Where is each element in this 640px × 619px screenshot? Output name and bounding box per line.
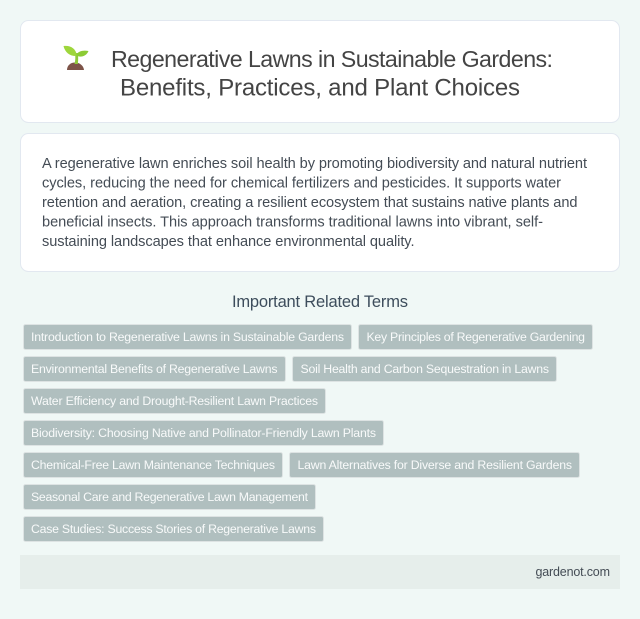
- chip: soil health: Soil Health and Carbon Sequestration in Lawns: [300, 362, 549, 376]
- chip: environmental benefits: Environmental Benefits of Regenerative Lawns: [31, 362, 278, 376]
- chip: case studies: Case Studies: Success Stories of Regenerative Lawns: [31, 522, 316, 536]
- description text: [42, 156, 587, 250]
- chip: seasonal care: [24, 484, 316, 510]
- chip: chemical-free: Chemical-Free Lawn Maintenance Techniques: [31, 458, 275, 472]
- chip: lawn alternatives: Lawn Alternatives for Diverse and Resilient Gardens: [298, 458, 572, 472]
- title text: Regenerative Lawns in Sustainable Gardens:: [111, 46, 553, 72]
- chip: environmental benefits: [24, 356, 286, 382]
- chip: biodiversity: [24, 420, 384, 446]
- chip: key principles: Key Principles of Regenerative Gardening: [366, 330, 585, 344]
- description text: A regenerative lawn enriches soil health by promoting biodiversity and natural nutrient: [42, 156, 587, 172]
- description text: cycles, reducing the need for chemical fertilizers and pesticides. It supports water: [42, 176, 561, 192]
- panel: title: [20, 20, 620, 122]
- chip: case studies: [24, 516, 324, 542]
- title text: [111, 46, 553, 102]
- chip: water efficiency: [24, 388, 326, 414]
- chip: key principles: [358, 324, 592, 350]
- description text: beneficial insects. This approach transforms traditional lawns into vibrant, self-: [42, 214, 543, 230]
- footer: [20, 555, 620, 589]
- chip: seasonal care: Seasonal Care and Regenerative Lawn Management: [31, 490, 309, 504]
- title text: Benefits, Practices, and Plant Choices: [120, 74, 520, 102]
- panel: description: [20, 134, 620, 272]
- heading: important related terms: Important Related Terms: [232, 293, 408, 311]
- term chips: [24, 324, 592, 542]
- chip: lawn alternatives: [290, 452, 580, 478]
- description text: retention and aeration, creating a resilient ecosystem that sustains native plants and: [42, 195, 578, 211]
- footer source text: gardenot.com: [536, 565, 610, 579]
- chip: biodiversity: Biodiversity: Choosing Native and Pollinator-Friendly Lawn Plants: [31, 426, 376, 440]
- chip: water efficiency: Water Efficiency and Drought-Resilient Lawn Practices: [31, 394, 318, 408]
- description text: sustaining landscapes that enhance environmental quality.: [42, 234, 414, 250]
- chip: introduction: [24, 324, 352, 350]
- chip: chemical-free: [24, 452, 282, 478]
- icon: seedling: [64, 46, 88, 70]
- chip: soil health: [292, 356, 556, 382]
- chip: introduction: Introduction to Regenerative Lawns in Sustainable Gardens: [31, 330, 344, 344]
